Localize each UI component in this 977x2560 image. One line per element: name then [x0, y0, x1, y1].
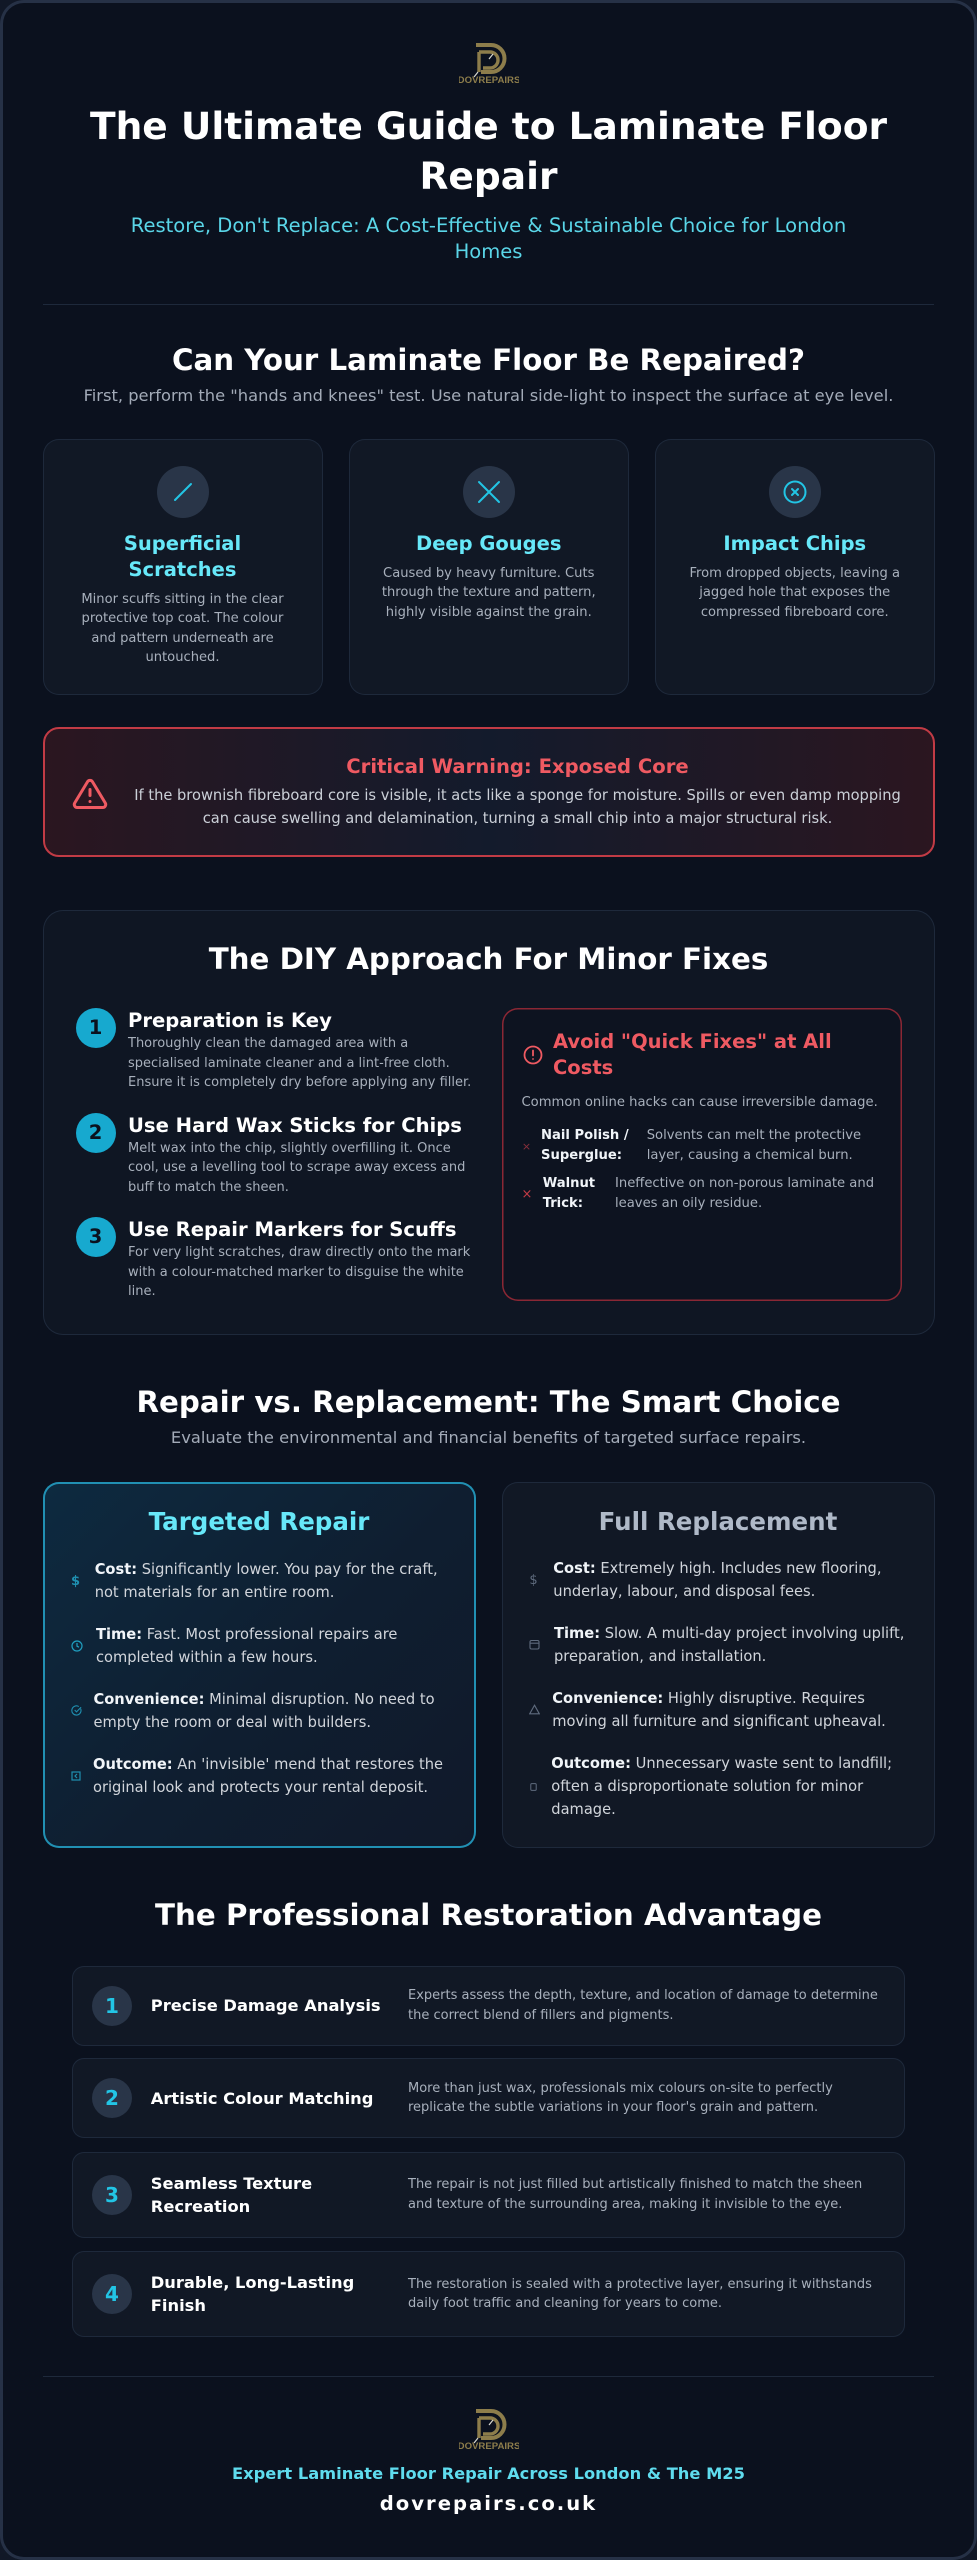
- step text: line.: [128, 1284, 156, 1299]
- website: dovrepairs.co.uk: [380, 2492, 597, 2515]
- row text: [95, 1561, 438, 1601]
- row text: [408, 2175, 862, 2214]
- card text: Caused by heavy furniture. Cuts: [383, 566, 594, 580]
- row text: [552, 1687, 886, 1733]
- cross mark: ×: [522, 1187, 532, 1202]
- step text: with a colour-matched marker to disguise the white: [128, 1264, 464, 1280]
- icon: dollar: $: [71, 1574, 80, 1588]
- icon: calendar: [528, 1639, 540, 1650]
- number badge: [92, 2274, 132, 2314]
- card text: and pattern underneath are: [91, 630, 274, 646]
- panel: avoid quick fixes: [502, 1008, 902, 1301]
- section heading: repair vs replacement: [136, 1385, 841, 1447]
- warning text: [134, 786, 901, 826]
- hack detail: [615, 1176, 874, 1211]
- row text: and texture of the surrounding area, making it invisible to the eye.: [408, 2196, 842, 2212]
- title: The Ultimate Guide to Laminate Floor: [90, 104, 887, 148]
- panel: full replacement: [502, 1482, 934, 1848]
- hack name: Superglue:: [541, 1148, 622, 1163]
- hack detail: Solvents can melt the protective: [647, 1128, 861, 1143]
- number badge: 1: [105, 1994, 119, 2018]
- row text: Outcome: Unnecessary waste sent to landfill;: [551, 1755, 892, 1772]
- subtitle: [131, 214, 846, 263]
- step text: buff to match the sheen.: [128, 1180, 289, 1195]
- warning text: If the brownish fibreboard core is visible, it acts like a sponge for moisture. Spills or even damp mopping: [134, 786, 901, 804]
- icon: warning triangle: [72, 778, 108, 809]
- number badge: [92, 2174, 132, 2214]
- row text: original look and protects your rental deposit.: [93, 1779, 428, 1796]
- row title: [151, 2172, 312, 2218]
- intro text: Evaluate the environmental and financial benefits of targeted surface repairs.: [171, 1428, 806, 1447]
- warning heading: Costs: [553, 1056, 613, 1079]
- card text: [81, 592, 284, 665]
- icon: bin: [530, 1782, 536, 1791]
- step text: For very light scratches, draw directly onto the mark: [128, 1245, 470, 1260]
- row title: Finish: [151, 2296, 206, 2315]
- number badge: 3: [105, 2182, 119, 2206]
- hack name: Walnut: [543, 1176, 595, 1191]
- step text: [128, 1036, 471, 1090]
- number badge: 4: [105, 2282, 119, 2306]
- icon: book: [71, 1771, 81, 1781]
- row text: Convenience: Minimal disruption. No need to: [94, 1691, 435, 1708]
- icon: clock: [71, 1640, 83, 1652]
- row title: [151, 2271, 354, 2317]
- icon: circled x: [769, 466, 821, 518]
- callout: critical warning: [42, 727, 934, 857]
- row title: Precise Damage Analysis: [151, 1996, 381, 2015]
- row text: Time: Slow. A multi-day project involving uplift,: [554, 1625, 904, 1642]
- step heading: Use Repair Markers for Scuffs: [128, 1218, 457, 1241]
- card: deep gouges: [349, 439, 628, 695]
- card text: Minor scuffs sitting in the clear: [81, 592, 284, 606]
- tagline: Expert Laminate Floor Repair Across London & The M25: [232, 2464, 745, 2483]
- header: [90, 43, 887, 263]
- row text: [551, 1752, 892, 1821]
- intro text: Common online hacks can cause irreversible damage.: [522, 1095, 878, 1110]
- card text: jagged hole that exposes the: [699, 585, 890, 600]
- subtitle: Homes: [455, 240, 522, 263]
- number badge: 2: [89, 1121, 102, 1144]
- icon: check: [71, 1705, 82, 1716]
- row text: Cost: Extremely high. Includes new flooring,: [553, 1560, 882, 1577]
- card heading: [124, 532, 241, 581]
- card text: compressed fibreboard core.: [701, 604, 889, 620]
- row title: Recreation: [151, 2196, 250, 2216]
- section heading: can it be repaired: [84, 343, 893, 405]
- cross mark: ×: [522, 1140, 531, 1153]
- number badge: [92, 1986, 132, 2026]
- row text: empty the room or deal with builders.: [94, 1714, 371, 1731]
- hack name: [541, 1128, 629, 1163]
- hack: nail polish: [522, 1128, 861, 1163]
- icon: alert circle: [524, 1046, 542, 1064]
- number badge: [92, 2078, 132, 2118]
- row 3: [72, 2152, 904, 2238]
- number badge: 2: [105, 2086, 119, 2110]
- subtitle: Restore, Don't Replace: A Cost-Effective & Sustainable Choice for London: [131, 214, 846, 237]
- row text: More than just wax, professionals mix colours on-site to perfectly: [408, 2080, 833, 2096]
- row: convenience: [71, 1691, 435, 1731]
- step 1: [76, 1008, 471, 1090]
- row text: often a disproportionate solution for minor: [551, 1778, 863, 1795]
- row text: underlay, labour, and disposal fees.: [553, 1583, 815, 1600]
- heading: The Professional Restoration Advantage: [155, 1898, 822, 1932]
- step heading: Use Hard Wax Sticks for Chips: [128, 1114, 462, 1137]
- card text: [689, 566, 900, 620]
- step text: [128, 1245, 470, 1299]
- card heading: Deep Gouges: [416, 532, 561, 555]
- row text: The restoration is sealed with a protective layer, ensuring it withstands: [408, 2276, 872, 2292]
- section: professional restoration: [43, 1895, 934, 2337]
- row text: Cost: Significantly lower. You pay for the craft,: [95, 1561, 438, 1578]
- intro text: First, perform the "hands and knees" test. Use natural side-light to inspect the surface at eye level.: [84, 386, 893, 405]
- card: impact chips: [655, 439, 934, 695]
- step text: [128, 1141, 465, 1195]
- row text: [93, 1756, 443, 1796]
- warning heading: Critical Warning: Exposed Core: [346, 755, 689, 778]
- panel: targeted repair: [42, 1482, 476, 1848]
- number badge: [76, 1008, 116, 1048]
- row text: Time: Fast. Most professional repairs are: [96, 1626, 397, 1643]
- row text: not materials for an entire room.: [95, 1584, 334, 1601]
- warning text: can cause swelling and delamination, turning a small chip into a major structural risk.: [203, 810, 832, 826]
- number badge: 3: [89, 1225, 102, 1248]
- row text: Experts assess the depth, texture, and location of damage to determine: [408, 1988, 878, 2003]
- row 1: [72, 1966, 904, 2046]
- card text: protective top coat. The colour: [82, 611, 283, 626]
- row 2: [72, 2058, 904, 2138]
- number badge: [76, 1113, 116, 1153]
- card heading: Superficial: [124, 532, 241, 555]
- row: outcome: [530, 1752, 910, 1821]
- step 3: [76, 1217, 470, 1299]
- step text: Thoroughly clean the damaged area with a: [128, 1036, 408, 1051]
- row: time: [529, 1625, 904, 1665]
- hack detail: layer, causing a chemical burn.: [647, 1148, 853, 1163]
- row title: Durable, Long-Lasting: [151, 2273, 354, 2292]
- panel heading: Full Replacement: [599, 1506, 837, 1536]
- row text: [408, 2078, 833, 2118]
- row text: The repair is not just filled but artistically finished to match the sheen: [408, 2177, 862, 2192]
- hack detail: leaves an oily residue.: [615, 1196, 762, 1211]
- hack name: Nail Polish /: [541, 1128, 629, 1143]
- card heading: Impact Chips: [723, 532, 866, 555]
- row: cost: [529, 1560, 882, 1600]
- row text: replicate the subtle variations in your floor's grain and pattern.: [408, 2100, 818, 2115]
- row text: [94, 1691, 435, 1731]
- row: convenience: [530, 1687, 910, 1733]
- step text: specialised laminate cleaner and a lint-free cloth.: [128, 1056, 450, 1070]
- warning heading: Avoid "Quick Fixes" at All: [553, 1030, 832, 1053]
- step text: cool, use a levelling tool to scrape away excess and: [128, 1160, 465, 1175]
- row text: daily foot traffic and cleaning for years to come.: [408, 2296, 722, 2311]
- hack: walnut trick: [522, 1176, 874, 1211]
- heading: Repair vs. Replacement: The Smart Choice: [136, 1385, 841, 1419]
- card: superficial scratches: [42, 439, 322, 695]
- title: Repair: [420, 154, 557, 198]
- row text: the correct blend of fillers and pigments.: [408, 2008, 674, 2022]
- card text: [382, 566, 596, 620]
- step 2: [76, 1113, 465, 1195]
- row text: [554, 1622, 904, 1668]
- logo: [458, 2408, 518, 2450]
- row text: [96, 1626, 397, 1666]
- row text: Convenience: Highly disruptive. Requires: [552, 1690, 865, 1707]
- row text: Outcome: An 'invisible' mend that restores the: [93, 1756, 443, 1773]
- row text: preparation, and installation.: [554, 1648, 766, 1665]
- card text: untouched.: [145, 650, 220, 665]
- row: outcome: [71, 1756, 443, 1796]
- heading: Can Your Laminate Floor Be Repaired?: [172, 343, 805, 377]
- step text: Melt wax into the chip, slightly overfilling it. Once: [128, 1141, 451, 1156]
- hack detail: Ineffective on non-porous laminate and: [615, 1176, 874, 1191]
- icon: triangle: [528, 1704, 540, 1715]
- card text: through the texture and pattern,: [382, 585, 596, 600]
- hack name: [542, 1176, 595, 1211]
- row text: completed within a few hours.: [96, 1649, 318, 1666]
- card text: highly visible against the grain.: [386, 604, 592, 620]
- row 4: [72, 2251, 904, 2337]
- row text: damage.: [551, 1801, 616, 1818]
- logo: [458, 43, 519, 84]
- panel heading: The DIY Approach For Minor Fixes: [209, 942, 768, 976]
- card heading: Scratches: [128, 558, 236, 581]
- number badge: [76, 1217, 116, 1257]
- icon: dollar: $: [529, 1572, 538, 1588]
- row text: [553, 1560, 882, 1600]
- step heading: Preparation is Key: [128, 1009, 332, 1032]
- row title: Artistic Colour Matching: [151, 2088, 373, 2108]
- row text: [408, 2274, 872, 2314]
- row: cost: [71, 1561, 438, 1601]
- number badge: 1: [89, 1016, 102, 1039]
- title: [90, 104, 887, 198]
- step text: Ensure it is completely dry before applying any filler.: [128, 1075, 471, 1090]
- row: time: [71, 1626, 397, 1666]
- row text: [408, 1986, 878, 2025]
- panel: DIY approach: [42, 910, 934, 1335]
- hack name: Trick:: [543, 1196, 583, 1211]
- row title: Seamless Texture: [151, 2174, 312, 2192]
- row text: moving all furniture and significant upheaval.: [552, 1713, 886, 1730]
- warning heading: [553, 1030, 832, 1079]
- card text: From dropped objects, leaving a: [689, 566, 900, 580]
- hack detail: [647, 1128, 861, 1163]
- icon: slash: [156, 466, 208, 518]
- panel heading: Targeted Repair: [149, 1507, 369, 1536]
- footer: [43, 2408, 934, 2520]
- icon: cross: [463, 466, 515, 518]
